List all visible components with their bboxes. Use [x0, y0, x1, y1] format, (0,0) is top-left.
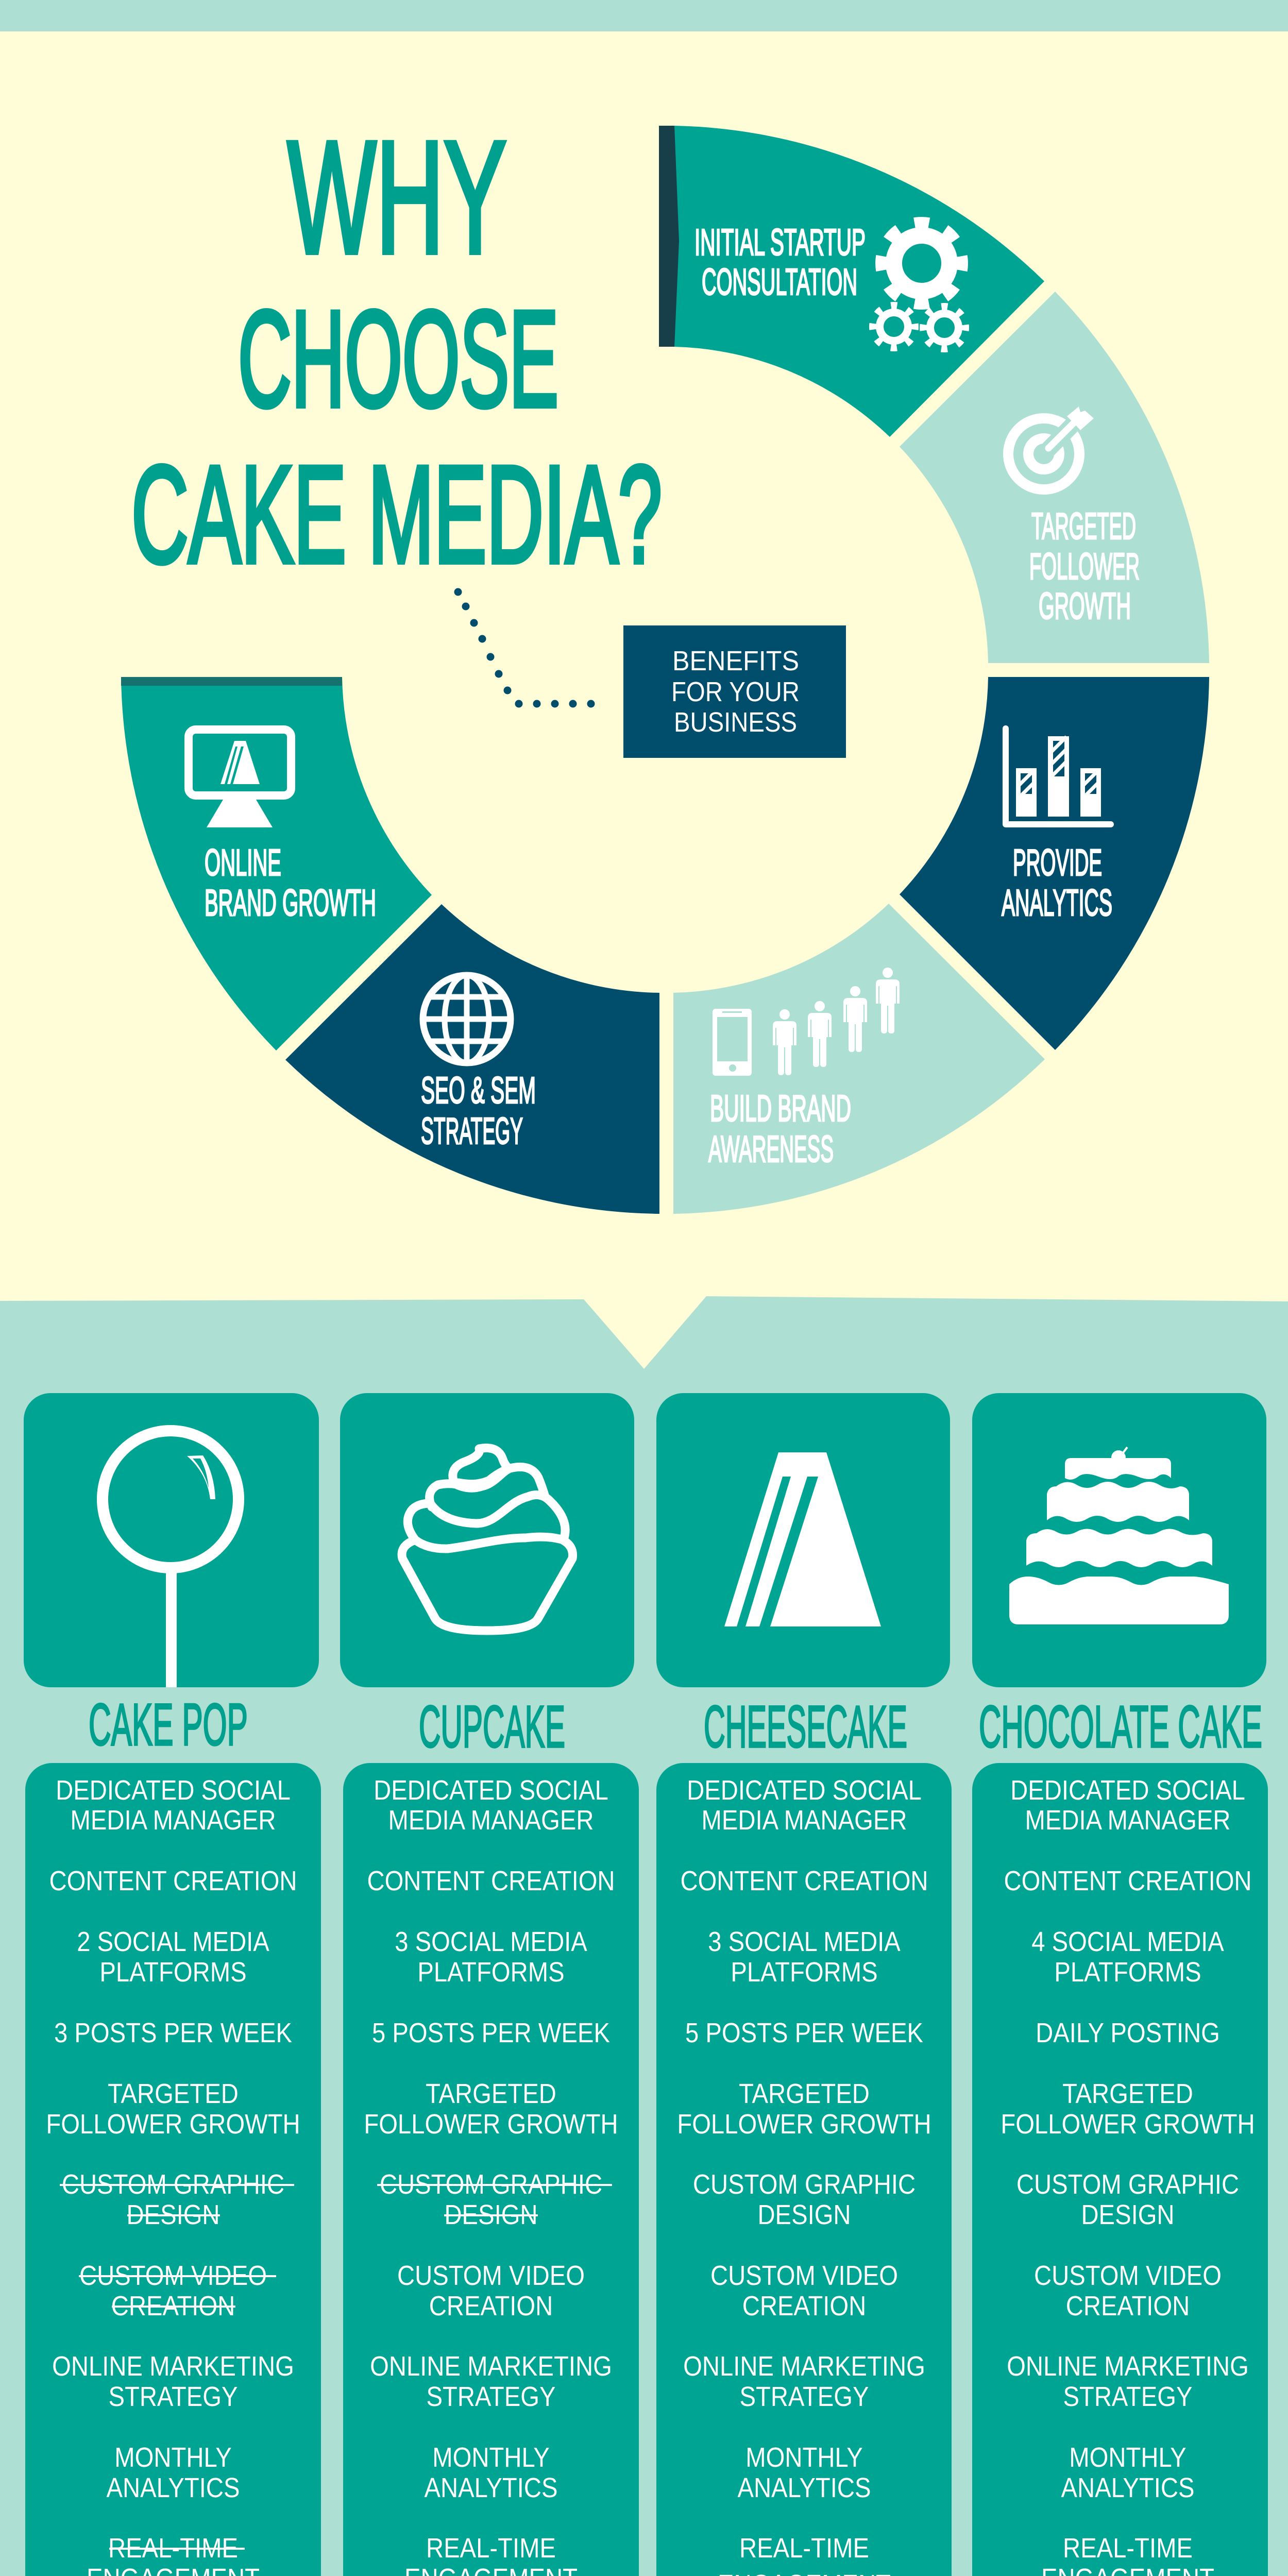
title: [131, 108, 662, 591]
panel: cake pop features: MONTHLY: [114, 2442, 232, 2473]
panel: cheesecake features: ANALYTICS: [738, 2472, 871, 2503]
pricing band: [0, 1296, 1288, 2576]
panel: cake pop features: PLATFORMS: [99, 1956, 247, 1988]
icon: monitor with cake: [189, 730, 291, 827]
panel: chocolate cake features: TARGETED: [1062, 2078, 1193, 2109]
segment: provide analytics: [900, 677, 1209, 1050]
segment: initial startup consultation: INITIAL STARTUP: [694, 222, 866, 263]
panel: cheesecake features: CUSTOM GRAPHIC: [693, 2168, 916, 2200]
panel: cake pop features: [25, 1763, 321, 2576]
panel: cake pop features: CREATION: [111, 2290, 235, 2321]
panel: cheesecake features: MEDIA MANAGER: [702, 1804, 907, 1836]
panel: chocolate cake features: 4 SOCIAL MEDIA: [1031, 1926, 1224, 1957]
panel: cheesecake features: PLATFORMS: [731, 1956, 878, 1988]
icon: bar chart: [1006, 728, 1111, 824]
segment: targeted follower growth: TARGETED: [1031, 506, 1136, 547]
segment: initial startup consultation: CONSULTATION: [702, 262, 857, 303]
panel: cake pop features: 2 SOCIAL MEDIA: [77, 1926, 269, 1957]
panel: cupcake features: DEDICATED SOCIAL: [374, 1774, 608, 1806]
panel: chocolate cake features: PLATFORMS: [1054, 1956, 1201, 1988]
panel: cake pop features: FOLLOWER GROWTH: [46, 2108, 300, 2140]
icon: gears: [873, 223, 965, 349]
panel: chocolate cake features: REAL-TIME: [1063, 2532, 1193, 2564]
segment: provide analytics: ANALYTICS: [1002, 883, 1112, 924]
panel: cupcake features: MEDIA MANAGER: [388, 1804, 594, 1836]
panel: cupcake features: STRATEGY: [426, 2381, 556, 2412]
heading: plan names: [89, 1692, 1262, 1760]
panel: chocolate cake features: MEDIA MANAGER: [1025, 1804, 1230, 1836]
panel: cake pop icon: [24, 1393, 319, 1687]
panel: chocolate cake features: CONTENT CREATION: [1004, 1865, 1252, 1896]
panel: cake pop features: DEDICATED SOCIAL: [56, 1774, 291, 1806]
panel: cheesecake features: CUSTOM VIDEO: [710, 2260, 898, 2291]
panel: cupcake features: ONLINE MARKETING: [370, 2350, 612, 2382]
segment: build brand awareness: BUILD BRAND: [710, 1088, 851, 1129]
icon: people: [773, 968, 900, 1075]
panel: cheesecake icon: [656, 1393, 950, 1687]
panel: cupcake features: [343, 1763, 639, 2576]
segment: provide analytics: PROVIDE: [1013, 842, 1102, 884]
panel: cheesecake features: MONTHLY: [745, 2442, 863, 2473]
segment: build brand awareness: [673, 904, 1045, 1214]
panel: cheesecake features: CREATION: [742, 2290, 866, 2321]
panel: cake pop features: ONLINE MARKETING: [52, 2350, 294, 2382]
panel: cake pop features: 3 POSTS PER WEEK: [54, 2017, 292, 2048]
panel: cake pop features: CUSTOM GRAPHIC: [62, 2168, 284, 2200]
panel: cheesecake features: REAL-TIME: [739, 2532, 869, 2564]
segment: seo and sem strategy: STRATEGY: [421, 1111, 523, 1152]
segment: targeted follower growth: GROWTH: [1039, 586, 1131, 627]
segment: targeted follower growth: [900, 292, 1209, 663]
top band: [0, 0, 1288, 31]
panel: cheesecake features: 3 SOCIAL MEDIA: [708, 1926, 901, 1957]
panel: cupcake features: 3 SOCIAL MEDIA: [395, 1926, 587, 1957]
panel: cake pop features: CONTENT CREATION: [49, 1865, 297, 1896]
panel: cake pop features: STRATEGY: [108, 2381, 238, 2412]
panel: chocolate cake features: ONLINE MARKETING: [1007, 2350, 1249, 2382]
panel: cupcake features: REAL-TIME: [426, 2532, 556, 2564]
panel: cupcake features: CUSTOM VIDEO: [397, 2260, 585, 2291]
heading: plan names: CAKE POP: [89, 1692, 248, 1758]
segment: seo and sem strategy: SEO & SEM: [421, 1070, 536, 1111]
panel: cheesecake features: CONTENT CREATION: [680, 1865, 928, 1896]
panel: chocolate cake features: DESIGN: [1081, 2199, 1175, 2230]
panel: cupcake features: CONTENT CREATION: [367, 1865, 615, 1896]
panel: cupcake features: DESIGN: [444, 2199, 538, 2230]
panel: chocolate cake features: STRATEGY: [1063, 2381, 1193, 2412]
panel: cupcake icon: [340, 1393, 634, 1687]
panel: cupcake features: FOLLOWER GROWTH: [364, 2108, 618, 2140]
segment: online brand growth: [121, 677, 432, 1050]
panel: cheesecake features: DESIGN: [757, 2199, 851, 2230]
icon: globe: [423, 975, 511, 1063]
panel: cheesecake features: DEDICATED SOCIAL: [687, 1774, 922, 1806]
panel: chocolate cake features: [972, 1763, 1268, 2576]
panel: cupcake features: 5 POSTS PER WEEK: [372, 2017, 610, 2048]
title: CAKE MEDIA?: [131, 437, 662, 591]
panel: cake pop features: DESIGN: [126, 2199, 220, 2230]
segment: seo and sem strategy: [285, 904, 659, 1214]
panel: cake pop features: ANALYTICS: [107, 2472, 240, 2503]
heading: plan names: CUPCAKE: [419, 1694, 565, 1760]
panel: cheesecake features: TARGETED: [739, 2078, 870, 2109]
panel: cupcake features: PLATFORMS: [417, 1956, 565, 1988]
segment: online brand growth: BRAND GROWTH: [205, 883, 376, 924]
panel: chocolate cake features: CUSTOM VIDEO: [1034, 2260, 1222, 2291]
panel: cheesecake features: ONLINE MARKETING: [683, 2350, 925, 2382]
icon: phone: [713, 1009, 752, 1076]
panel: chocolate cake features: ANALYTICS: [1061, 2472, 1194, 2503]
panel: chocolate cake features: CREATION: [1066, 2290, 1190, 2321]
callout: benefits for your business: BUSINESS: [674, 707, 797, 738]
segment: build brand awareness: AWARENESS: [708, 1129, 834, 1170]
segment: initial startup consultation: [659, 126, 1044, 437]
dotted connector: [454, 588, 595, 708]
panel: cake pop features: TARGETED: [108, 2078, 239, 2109]
segment: targeted follower growth: FOLLOWER: [1029, 546, 1140, 587]
panel: chocolate cake features: MONTHLY: [1069, 2442, 1187, 2473]
callout: benefits for your business: [623, 625, 846, 758]
panel: cake pop features: CUSTOM VIDEO: [79, 2260, 267, 2291]
segment: online brand growth: ONLINE: [205, 842, 281, 884]
panel: layer cake icon: [972, 1393, 1266, 1687]
title: WHY: [287, 108, 506, 286]
panel: cupcake features: CUSTOM GRAPHIC: [380, 2168, 602, 2200]
panel: cupcake features: MONTHLY: [432, 2442, 550, 2473]
panel: cake pop features: REAL-TIME: [108, 2532, 238, 2564]
panel: chocolate cake features: DEDICATED SOCIAL: [1010, 1774, 1245, 1806]
panel: cheesecake features: STRATEGY: [739, 2381, 869, 2412]
panel: cheesecake features: [656, 1763, 952, 2576]
heading: plan names: CHEESECAKE: [704, 1694, 907, 1760]
title: CHOOSE: [238, 283, 558, 435]
panel: chocolate cake features: FOLLOWER GROWTH: [1001, 2108, 1255, 2140]
panel: cake pop features: MEDIA MANAGER: [71, 1804, 276, 1836]
panel: cheesecake features: FOLLOWER GROWTH: [677, 2108, 931, 2140]
icon: target with arrow: [1008, 406, 1094, 489]
panel: cheesecake features: 5 POSTS PER WEEK: [685, 2017, 923, 2048]
panel: chocolate cake features: CUSTOM GRAPHIC: [1016, 2168, 1239, 2200]
panel: cupcake features: ANALYTICS: [425, 2472, 557, 2503]
panel: cupcake features: CREATION: [429, 2290, 553, 2321]
panel: cupcake features: TARGETED: [426, 2078, 556, 2109]
panel: chocolate cake features: DAILY POSTING: [1036, 2017, 1220, 2048]
callout: benefits for your business: FOR YOUR: [671, 676, 800, 707]
callout: benefits for your business: BENEFITS: [672, 646, 799, 676]
